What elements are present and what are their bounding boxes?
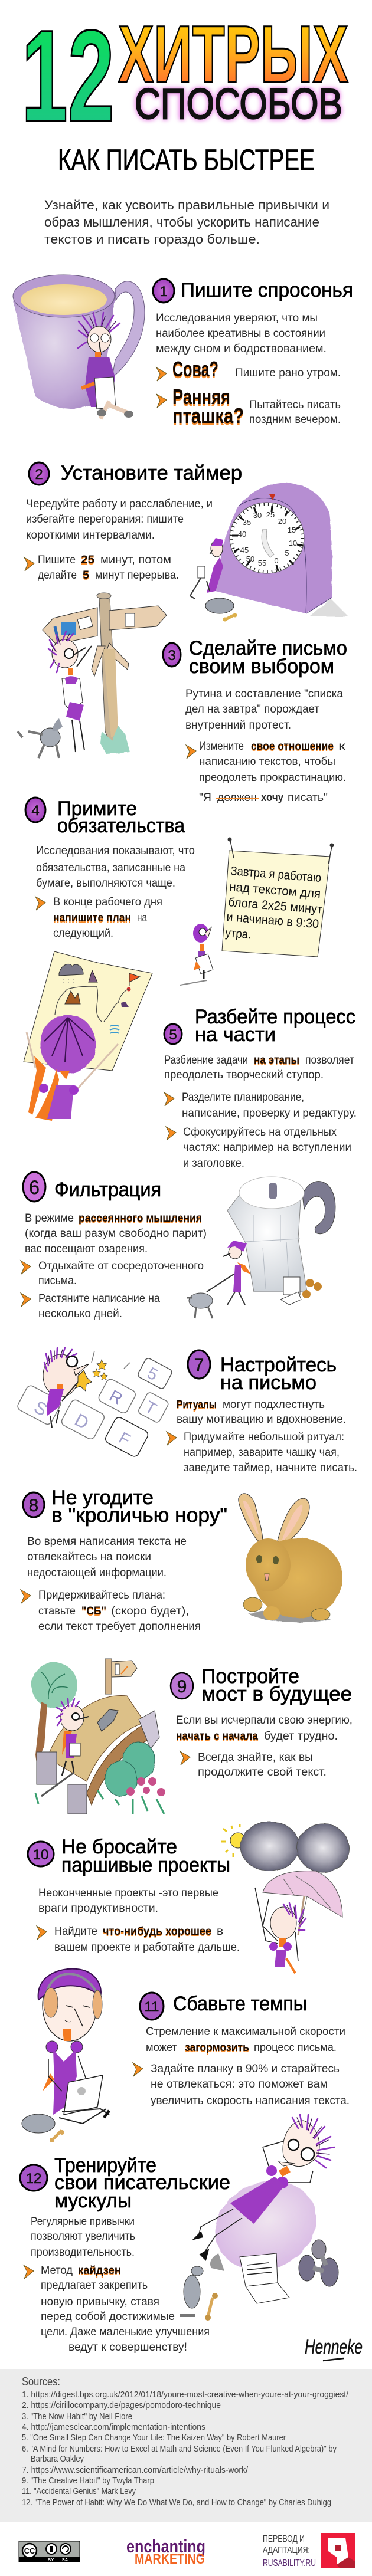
bullet xyxy=(21,1589,201,1633)
bullet: перед собой достижимые xyxy=(41,2311,175,2323)
badge 3 xyxy=(163,643,181,667)
body text: отвлекайтесь на поиски xyxy=(27,1551,151,1563)
sources list: 5. "One Small Step Can Change Your Life: The Kaizen Way" by Robert Maurer xyxy=(22,2433,286,2443)
body text: Чередуйте работу и расслабление, и xyxy=(26,498,213,510)
heading xyxy=(61,1836,230,1876)
body text: Регулярные привычки xyxy=(31,2216,135,2228)
body text: наиболее креативны в состоянии xyxy=(156,327,325,340)
heading: обязательства xyxy=(57,815,185,837)
heading: Пишите спросонья xyxy=(181,279,353,301)
bullet: новую привычку, ставя xyxy=(41,2296,159,2308)
panel: illustration map xyxy=(24,951,152,1121)
body text: позволяют увеличить xyxy=(31,2230,135,2243)
bullet: написанию текстов, чтобы xyxy=(199,756,335,768)
body text: преодолеть творческий ступор. xyxy=(164,1069,324,1081)
heading: Тренируйте xyxy=(54,2154,156,2177)
body text: Стремление к максимальной скорости xyxy=(146,2026,345,2038)
sources panel xyxy=(0,2369,372,2522)
bullet: owl: Пишите рано утром. xyxy=(235,367,341,379)
bullet: свое отношение xyxy=(251,740,334,753)
heading: Сделайте письмо xyxy=(189,637,347,659)
body text xyxy=(25,1212,207,1255)
bullet: Измените xyxy=(199,740,244,753)
illustration: timer: 45 xyxy=(240,546,249,554)
illustration: bridge xyxy=(31,1659,165,1814)
bullet 2: Растяните написание на xyxy=(38,1292,160,1305)
logo: creative commons: BY xyxy=(48,2557,54,2562)
badge 5: 5 xyxy=(169,1027,177,1043)
bullet: на xyxy=(137,912,147,924)
body text: внутренний протест. xyxy=(185,719,291,731)
panel: 5 break into parts xyxy=(164,1006,357,1170)
illustration: keyboard with character: F xyxy=(116,1428,133,1449)
heading: Не угодите xyxy=(51,1486,154,1509)
bullet: следующий. xyxy=(53,927,113,940)
body text: Исследования уверяют, что мы xyxy=(156,312,318,324)
panel: 8 rabbit hole xyxy=(21,1486,342,1633)
bullet: увеличить скорость написания текста. xyxy=(151,2095,350,2107)
bullet: early bird xyxy=(156,385,341,428)
panel: 9 bridge to the future xyxy=(31,1659,353,1814)
sources list: 7. https://www.scientificamerican.com/article/why-rituals-work/ xyxy=(22,2465,249,2475)
body text: Рутина и составление "списка xyxy=(185,688,343,700)
bullet: early bird: пташка? xyxy=(172,403,244,428)
badge 12: 12 xyxy=(26,2171,41,2187)
body text: избегайте перегорания: пишите xyxy=(26,513,184,526)
bullet: если текст требует дополнения xyxy=(38,1620,201,1633)
illustration: character on gym ball xyxy=(180,2115,338,2321)
body text xyxy=(156,312,327,355)
illustration: keyboard with character: T xyxy=(142,1397,159,1418)
logo: rusability translation credit xyxy=(263,2533,355,2568)
bullet 2: Сфокусируйтесь на отдельных xyxy=(183,1126,337,1138)
badge 7 xyxy=(188,1350,210,1379)
body text: обязательства, записанные на xyxy=(36,862,185,874)
illustration: timer: 25 xyxy=(266,510,275,519)
sources list: 11. "Accidental Genius" Mark Levy xyxy=(22,2486,136,2496)
intro text: Узнайте, как усвоить правильные привычки и xyxy=(44,198,329,212)
bullet: 5 xyxy=(83,569,89,582)
illustration: keyboard with character: R xyxy=(106,1386,126,1408)
body text: Неоконченные проекты -это первые xyxy=(38,1887,218,1899)
heading: Сбавьте темпы xyxy=(173,1993,307,2015)
heading: мускулы xyxy=(54,2190,132,2212)
badge 9 xyxy=(171,1673,193,1699)
body text: рассеянного мышления xyxy=(79,1212,202,1225)
logo: rusability translation credit: АДАПТАЦИЯ: xyxy=(263,2545,310,2555)
body text xyxy=(26,498,213,542)
body text: загормозить xyxy=(185,2042,249,2054)
badge 1: 1 xyxy=(159,284,168,300)
bullet: early bird: Ранняя xyxy=(172,385,230,409)
heading xyxy=(51,1486,227,1527)
badge 6: 6 xyxy=(29,1177,40,1198)
heading: паршивые проекты xyxy=(61,1854,230,1876)
intro text xyxy=(44,198,329,247)
sources list: 12. "The Power of Habit: Why We Do What We Do, and How to Change" by Charles Duhigg xyxy=(22,2498,331,2508)
bullet xyxy=(167,1431,357,1474)
bullet: Придумайте небольшой ритуал: xyxy=(184,1431,344,1443)
badge 12 xyxy=(20,2165,47,2191)
body text: Если вы исчерпали свою энергию, xyxy=(176,1714,353,1727)
logo: enchanting marketing: MARKETING xyxy=(135,2551,205,2567)
note on pins: Завтра я работаю xyxy=(230,864,322,885)
heading: в "кроличью нору" xyxy=(51,1504,227,1527)
body text xyxy=(38,1887,218,1915)
heading xyxy=(57,798,185,837)
bullet: (скоро будет), xyxy=(111,1605,189,1617)
heading xyxy=(54,2154,230,2212)
bullet: Найдите xyxy=(54,1925,97,1938)
bullet 1: Отдыхайте от сосредоточенного xyxy=(38,1260,204,1272)
body text: (когда ваш разум свободно парит) xyxy=(25,1228,207,1240)
bullet: owl: Сова? xyxy=(172,357,218,381)
bullet 1: написание, проверку и редактуру. xyxy=(182,1107,357,1120)
bullet: например, заварите чашку чая, xyxy=(184,1446,340,1459)
logo: creative commons xyxy=(19,2541,80,2562)
body text xyxy=(27,1535,187,1579)
bullet 2: несколько дней. xyxy=(38,1308,122,1320)
body text xyxy=(146,2026,345,2054)
body text xyxy=(176,1714,353,1743)
badge 5 xyxy=(164,1024,182,1044)
sources heading: Sources: xyxy=(22,2375,60,2388)
heading xyxy=(195,1006,355,1046)
illustration: timer: 35 xyxy=(243,518,251,527)
logo: creative commons: SA xyxy=(62,2557,68,2562)
bullet: к xyxy=(338,740,346,753)
illustration: timer: 15 xyxy=(288,526,296,534)
sources list: 4. http://jamesclear.com/implementation-intentions xyxy=(22,2422,205,2432)
badge 10: 10 xyxy=(33,1847,48,1863)
heading: свои писательские xyxy=(54,2171,230,2194)
badge 1 xyxy=(153,279,174,303)
bullet: что-нибудь хорошее xyxy=(103,1925,211,1938)
intro text: образ мышления, чтобы ускорить написание xyxy=(44,215,319,229)
bullet: в xyxy=(217,1925,223,1938)
heading: на письмо xyxy=(220,1371,316,1394)
note on pins: и начинаю в 9:30 xyxy=(226,910,319,931)
heading: Примите xyxy=(57,798,137,820)
panel: 10 don't give up xyxy=(28,1822,349,1973)
body text xyxy=(36,845,195,890)
bullet: Придерживайтесь плана: xyxy=(38,1589,165,1602)
body text: Во время написания текста не xyxy=(27,1535,187,1548)
illustration: clouds and umbrella xyxy=(221,1822,349,1973)
bullet: должен xyxy=(217,792,257,804)
heading: на части xyxy=(195,1023,276,1046)
bullet: предлагает закрепить xyxy=(41,2279,148,2292)
bullet 1 xyxy=(164,1091,357,1120)
sources list xyxy=(22,2390,349,2508)
panel: 2 set a timer xyxy=(24,462,348,622)
badge 2: 2 xyxy=(35,467,43,483)
bullet 2: частях: например на вступлении xyxy=(183,1141,351,1154)
badge 9: 9 xyxy=(177,1677,187,1696)
bullet: Пишите xyxy=(38,554,76,566)
sources list: 1. https://digest.bps.org.uk/2012/01/18/youre-most-creative-when-youre-at-your-groggiest/ xyxy=(22,2390,349,2400)
panel: 7 get in the mood xyxy=(16,1348,357,1474)
bullet: Всегда знайте, как вы xyxy=(198,1751,313,1764)
logo: enchanting marketing xyxy=(126,2536,205,2567)
heading xyxy=(201,1665,352,1705)
illustration: timer: 55 xyxy=(258,559,266,567)
illustration: character with headphones xyxy=(22,1969,109,2142)
bullet: преодолеть прокрастинацию. xyxy=(199,772,346,784)
panel: 12 train your muscles xyxy=(20,2115,338,2354)
illustration: timer: 30 xyxy=(253,511,262,520)
badge 4 xyxy=(25,798,45,822)
bullet: вашем проекте и работайте дальше. xyxy=(54,1941,240,1954)
body text: Разбиение задачи xyxy=(164,1054,248,1067)
panel: 11 slow down xyxy=(22,1969,350,2142)
note on pins xyxy=(222,838,334,957)
badge 10 xyxy=(28,1842,54,1866)
heading: мост в будущее xyxy=(201,1683,352,1705)
body text: вашу мотивацию и вдохновение. xyxy=(177,1413,346,1426)
heading: Фильтрация xyxy=(54,1179,161,1201)
illustration: keyboard with character: D xyxy=(71,1410,92,1433)
bullet 2 xyxy=(21,1292,160,1320)
sources list: 3. "The Now Habit" by Neil Fiore xyxy=(22,2411,132,2421)
illustration: timer xyxy=(190,483,348,622)
bullet xyxy=(186,740,346,804)
bullet: Метод xyxy=(41,2265,73,2277)
body text: вас посещают озарения. xyxy=(25,1243,148,1255)
bullet: цели. Даже маленькие улучшения xyxy=(41,2326,210,2338)
heading xyxy=(220,1354,337,1394)
body text: производительность. xyxy=(31,2246,135,2259)
bullet xyxy=(35,896,162,940)
bullet: 25 xyxy=(81,554,94,566)
body text: на этапы xyxy=(254,1054,299,1067)
illustration: keyboard with character: S xyxy=(31,1397,50,1420)
body text: может xyxy=(146,2042,177,2054)
body text: позволяет xyxy=(305,1054,354,1067)
illustration: timer: 10 xyxy=(289,539,297,547)
badge 8 xyxy=(23,1492,44,1517)
bullet: Задайте планку в 90% и старайтесь xyxy=(151,2063,340,2075)
note on pins: утра. xyxy=(225,926,252,941)
bullet xyxy=(24,554,179,582)
bullet 1 xyxy=(21,1260,204,1287)
bullet: ставьте xyxy=(38,1605,76,1617)
sources list: 9. "The Creative Habit" by Twyla Tharp xyxy=(22,2476,154,2486)
body text: начать с начала xyxy=(176,1730,258,1743)
body text: короткими интервалами. xyxy=(26,529,155,542)
illustration: moka pot with character xyxy=(187,1177,335,1318)
bullet xyxy=(37,1925,240,1954)
badge 7: 7 xyxy=(194,1356,204,1375)
bullet: В конце рабочего дня xyxy=(53,896,162,908)
bullet: early bird: поздним вечером. xyxy=(249,414,341,426)
bullet: не отвлекаться: это поможет вам xyxy=(151,2078,328,2091)
body text xyxy=(31,2216,135,2259)
body text xyxy=(185,688,343,731)
panel: 4 commit xyxy=(25,798,334,985)
heading: Установите таймер xyxy=(61,462,242,484)
bullet xyxy=(180,1751,327,1778)
bullet: кайдзен xyxy=(78,2265,121,2277)
logo: enchanting marketing: enchanting xyxy=(126,2536,205,2557)
bullet 2 xyxy=(166,1126,351,1170)
title number 12: 12 xyxy=(21,3,115,149)
heading xyxy=(189,637,347,678)
panel: 6 filtration xyxy=(21,1172,335,1320)
sources list: 2. https://cirillocompany.de/pages/pomodoro-technique xyxy=(22,2400,221,2410)
badge 8: 8 xyxy=(29,1496,38,1515)
badge 11: 11 xyxy=(145,1999,159,2015)
body text: недостающей информации. xyxy=(27,1567,167,1579)
bullet: напишите план xyxy=(53,912,131,924)
note on pins: блога 2x25 минут xyxy=(228,895,323,917)
illustration: mug with character xyxy=(13,275,145,419)
logo: creative commons: CC xyxy=(24,2547,35,2555)
illustration: timer: 5 xyxy=(285,549,289,557)
body text: Ритуалы xyxy=(177,1399,217,1411)
body text: будет трудно. xyxy=(264,1730,338,1743)
bullet: минут перерыва. xyxy=(95,569,179,582)
illustration: keyboard with character: 5 xyxy=(144,1364,161,1384)
body text: В режиме xyxy=(25,1212,74,1225)
body text: могут подхлестнуть xyxy=(223,1399,325,1411)
body text: Исследования показывают, что xyxy=(36,845,195,857)
badge 3: 3 xyxy=(168,648,176,664)
heading: Постройте xyxy=(201,1665,299,1688)
sources list: Barbara Oakley xyxy=(31,2454,84,2464)
illustration: timer: 50 xyxy=(246,554,254,563)
note on pins: над текстом для xyxy=(229,880,321,901)
bullet xyxy=(133,2063,350,2107)
intro text: текстов и писать гораздо больше. xyxy=(44,232,260,247)
body text: враги продуктивности. xyxy=(38,1902,158,1915)
badge 11 xyxy=(140,1993,164,2020)
bullet 1: письма. xyxy=(38,1275,77,1287)
bullet 2: и заголовке. xyxy=(183,1157,244,1170)
body text xyxy=(164,1054,354,1081)
heading: Настройтесь xyxy=(220,1354,337,1376)
body text: между сном и бодрствованием. xyxy=(156,343,327,355)
illustration: keyboard with character xyxy=(16,1348,173,1458)
badge 6 xyxy=(23,1172,45,1202)
title xyxy=(21,3,348,149)
bullet: минут, потом xyxy=(100,554,171,566)
bullet: "СБ" xyxy=(81,1605,106,1617)
illustration: timer: 40 xyxy=(238,530,246,539)
bullet: owl xyxy=(156,357,341,381)
illustration: character with laptop xyxy=(180,924,213,985)
bullet: хочу xyxy=(261,792,283,804)
heading: Не бросайте xyxy=(61,1836,177,1858)
bullet: early bird: Пытайтесь писать xyxy=(249,399,341,411)
body text: бумаге, выполняются чаще. xyxy=(36,877,175,890)
logo: rusability translation credit: ПЕРЕВОД И xyxy=(263,2534,305,2544)
illustration: timer: 20 xyxy=(278,517,286,526)
bullet: делайте xyxy=(38,569,77,582)
panel: 3 make writing your choice xyxy=(18,593,347,804)
illustration: rabbit xyxy=(239,1494,342,1622)
badge 4: 4 xyxy=(31,803,40,819)
bullet: ведут к совершенству! xyxy=(68,2341,187,2354)
body text xyxy=(177,1399,346,1426)
bullet 1: Разделите планирование, xyxy=(182,1091,304,1104)
body text: дел на завтра" порождает xyxy=(185,703,319,716)
illustration: timer: 0 xyxy=(274,556,279,565)
bullet: продолжите свой текст. xyxy=(198,1766,327,1778)
bullet: заведите таймер, начните писать. xyxy=(184,1462,357,1474)
logo: rusability translation credit: RUSABILITY.RU xyxy=(263,2558,316,2568)
body text: процесс письма. xyxy=(254,2042,337,2054)
bullet xyxy=(24,2265,210,2354)
badge 2 xyxy=(29,462,49,485)
panel: 1 write when sleepy xyxy=(13,275,353,428)
bullet: "Я xyxy=(199,792,211,804)
heading: своим выбором xyxy=(189,655,334,678)
heading: Разбейте процесс xyxy=(195,1006,355,1028)
illustration: signpost with character xyxy=(18,593,167,758)
bullet: писать" xyxy=(288,792,328,804)
